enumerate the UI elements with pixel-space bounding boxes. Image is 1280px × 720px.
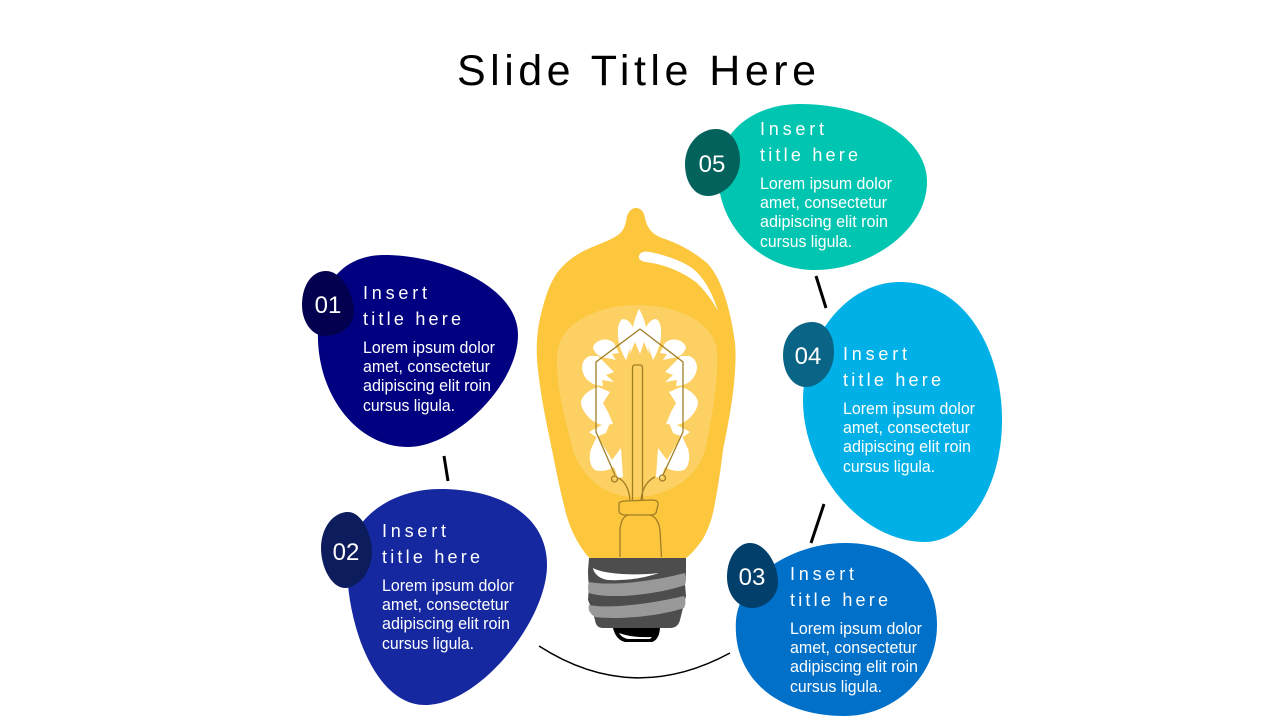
filament wires xyxy=(596,329,683,557)
badge 03: 03 xyxy=(739,564,765,591)
badge 05: 05 xyxy=(699,151,725,178)
text block 05: title here xyxy=(760,145,858,165)
text block 04: adipiscing elit roin xyxy=(843,438,971,456)
connector: 04 to 05 xyxy=(816,276,826,308)
text block 02: adipiscing elit roin xyxy=(382,615,510,633)
text block 03: cursus ligula. xyxy=(790,678,882,696)
text block 05: adipiscing elit roin xyxy=(760,213,888,231)
panel: step 02 xyxy=(321,489,547,705)
panel: step 01 xyxy=(302,255,518,447)
text block 03: Insert xyxy=(790,564,854,584)
connector: 03 to 04 xyxy=(811,504,824,543)
icon: light bulb xyxy=(537,208,736,642)
text block 02: cursus ligula. xyxy=(382,635,474,653)
text block 01: title here xyxy=(363,309,461,329)
text block 02: title here xyxy=(382,547,480,567)
text block 03: adipiscing elit roin xyxy=(790,658,918,676)
text block 04: Lorem ipsum dolor xyxy=(843,400,976,418)
flower top petal xyxy=(630,309,649,354)
text block 05 xyxy=(760,119,893,251)
flower left petals xyxy=(581,319,635,478)
badge 02 xyxy=(321,512,372,588)
badge 01 xyxy=(302,271,354,336)
bulb glass xyxy=(537,208,736,558)
text block 01: cursus ligula. xyxy=(363,397,455,415)
flower right petals xyxy=(644,319,698,478)
text block 04: cursus ligula. xyxy=(843,458,935,476)
text block 04: title here xyxy=(843,370,941,390)
text block 05: amet, consectetur xyxy=(760,194,888,212)
text block 02: Insert xyxy=(382,521,446,541)
text block 03 xyxy=(790,564,923,696)
text block 05: Lorem ipsum dolor xyxy=(760,175,893,193)
screw base xyxy=(588,558,686,642)
inner glow xyxy=(557,305,717,497)
text block 04: Insert xyxy=(843,344,907,364)
text block 04: amet, consectetur xyxy=(843,419,971,437)
panel: step 05 xyxy=(685,104,927,270)
panel: step 04 xyxy=(783,282,1002,542)
text block 02 xyxy=(382,521,515,653)
text block 01: adipiscing elit roin xyxy=(363,377,491,395)
badge 04: 04 xyxy=(795,343,821,370)
connector: 01 to 02 xyxy=(444,456,448,481)
bulb highlight xyxy=(639,252,718,311)
filament flower xyxy=(581,309,698,478)
panel: step 03 xyxy=(727,543,937,716)
title: Slide Title Here xyxy=(457,47,816,95)
connector: arc under bulb xyxy=(539,646,730,678)
text block 01: Lorem ipsum dolor xyxy=(363,339,496,357)
badge 02: 02 xyxy=(333,539,359,566)
badge 01: 01 xyxy=(315,292,341,319)
text block 02: amet, consectetur xyxy=(382,596,510,614)
text block 02: Lorem ipsum dolor xyxy=(382,577,515,595)
text block 05: Insert xyxy=(760,119,824,139)
badge 05 xyxy=(685,129,740,196)
text block 01: Insert xyxy=(363,283,427,303)
text block 03: title here xyxy=(790,590,888,610)
text block 01: amet, consectetur xyxy=(363,358,491,376)
text block 03: amet, consectetur xyxy=(790,639,918,657)
text block 01 xyxy=(363,283,496,415)
badge 04 xyxy=(783,322,834,387)
text block 05: cursus ligula. xyxy=(760,233,852,251)
text block 04 xyxy=(843,344,976,476)
badge 03 xyxy=(727,543,778,608)
text block 03: Lorem ipsum dolor xyxy=(790,620,923,638)
